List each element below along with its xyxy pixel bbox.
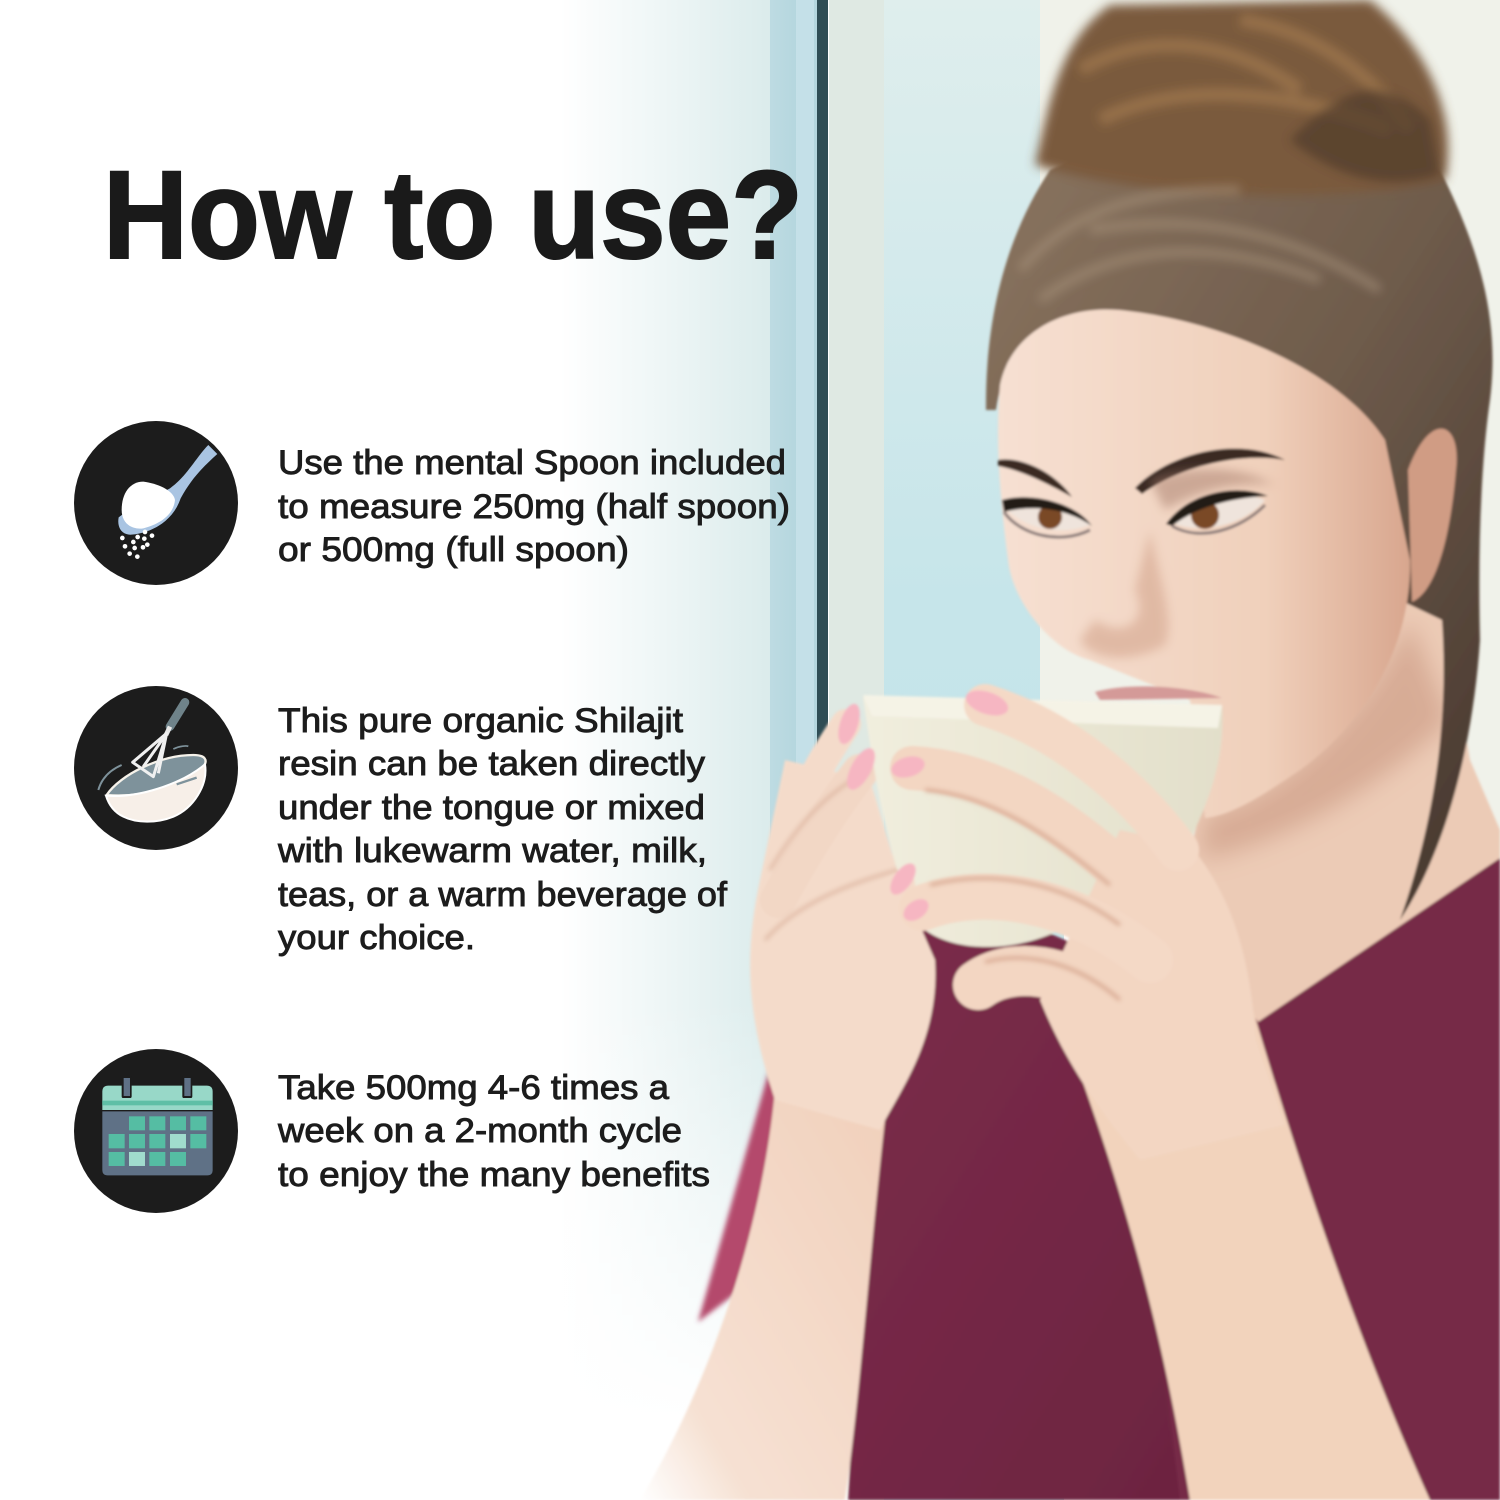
- nose shadow: [1080, 530, 1168, 658]
- right eye: [1166, 490, 1268, 533]
- text: step 1: [278, 444, 790, 569]
- text: step 3: [277, 1069, 710, 1194]
- text: step 3: week on a 2-month cycle: [277, 1112, 682, 1150]
- sleeve edge: [698, 1060, 800, 1322]
- nails: [834, 686, 1011, 925]
- left arm: [640, 1090, 885, 1500]
- text: step 1: Use the mental Spoon included: [278, 444, 786, 482]
- text: step 2: [277, 702, 728, 957]
- text: step 2: with lukewarm water, milk,: [277, 832, 707, 870]
- text: step 2: under the tongue or mixed: [278, 789, 705, 827]
- icon: whisk and bowl: [74, 686, 238, 850]
- cup handle: [851, 800, 905, 862]
- icon: calendar: [74, 1049, 238, 1213]
- hair cap: [986, 132, 1493, 920]
- woman photo: [640, 0, 1500, 1500]
- left eye: [1002, 497, 1092, 537]
- bun shadow: [1290, 91, 1440, 182]
- text: step 2: teas, or a warm beverage of: [278, 876, 728, 914]
- left hand: [750, 724, 935, 1130]
- right arm: [1060, 1000, 1430, 1500]
- cup: [863, 697, 1222, 947]
- left eyebrow: [998, 459, 1072, 497]
- lips: [1095, 686, 1222, 700]
- text: step 2: your choice.: [278, 919, 475, 957]
- text: step 1: to measure 250mg (half spoon): [278, 488, 790, 526]
- neck and chest: [1180, 600, 1500, 1022]
- face: [998, 309, 1410, 818]
- shirt right body: [1120, 858, 1500, 1500]
- neck shadow: [1200, 620, 1450, 860]
- ear: [1408, 429, 1457, 602]
- shirt left: [848, 860, 1250, 1500]
- right hand: [912, 705, 1285, 1160]
- bun highlights: [1080, 20, 1410, 130]
- left pinky over cup handle: [815, 884, 902, 930]
- hair bun: [1035, 0, 1448, 196]
- text: step 2: This pure organic Shilajit: [278, 702, 684, 740]
- text: step 2: resin can be taken directly: [278, 745, 705, 783]
- right eyebrow: [1135, 449, 1285, 494]
- eye shadow: [1150, 469, 1275, 510]
- icon: spoon with powder: [74, 421, 238, 585]
- text: step 1: or 500mg (full spoon): [278, 531, 629, 569]
- cup rim: [863, 695, 1222, 728]
- text: step 3: Take 500mg 4-6 times a: [278, 1069, 669, 1107]
- title: How to use?: [103, 146, 803, 285]
- text: step 3: to enjoy the many benefits: [278, 1156, 710, 1194]
- hair streaks: [1020, 190, 1380, 300]
